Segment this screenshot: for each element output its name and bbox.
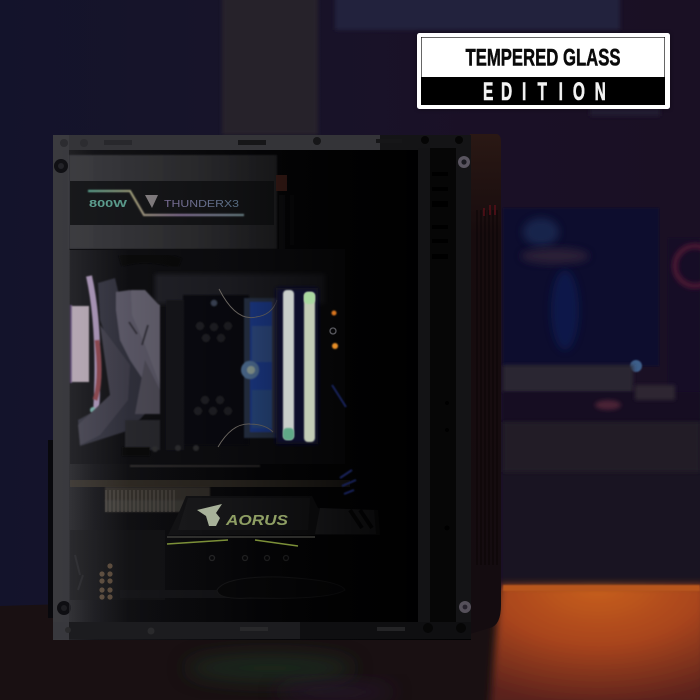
bright components behind glass: [167, 288, 356, 546]
front panel: [470, 134, 501, 634]
RGB glow strip: [272, 472, 312, 476]
badge subtitle: EDITION: [483, 78, 606, 106]
orange motherboard LEDs: [330, 310, 338, 349]
rear fan: [70, 276, 99, 414]
left frame: [53, 135, 69, 640]
copper wires: [218, 289, 277, 447]
AORUS label: AORUS: [225, 512, 288, 529]
frame markings: [60, 136, 466, 634]
logo mark: [145, 195, 158, 208]
power supply stripe: [88, 191, 244, 215]
wattage label: 800W: [89, 199, 128, 210]
red mesh glints: [484, 205, 495, 216]
brand label: THUNDERX3: [164, 198, 239, 210]
graphics card: [70, 480, 380, 600]
table surface: [0, 585, 700, 700]
badge title: TEMPERED GLASS: [466, 44, 620, 72]
CPU cooler tower: [166, 295, 249, 450]
motherboard area: [70, 249, 345, 467]
rear panel sliver: [48, 440, 54, 618]
RGB memory sticks: [276, 288, 318, 444]
blurred desk and keyboard: [503, 365, 700, 587]
badge: tempered glass edition: [417, 33, 670, 109]
PC case: [53, 134, 501, 640]
top frame: [53, 135, 471, 150]
blue cables: [332, 385, 356, 494]
glass haze: [69, 250, 129, 622]
front mesh vents: [477, 210, 497, 565]
blue cooler fan: [241, 298, 277, 438]
glass shading: [69, 150, 418, 622]
shroud: [168, 496, 380, 535]
lower motherboard: [70, 530, 345, 600]
glass panel: [53, 135, 471, 640]
bottom frame: [53, 622, 471, 639]
lower board details: [122, 420, 260, 467]
thumb screws: [54, 159, 68, 173]
AORUS eagle logo: [197, 504, 222, 526]
green accent lines: [167, 540, 298, 546]
blurred monitor: [503, 208, 700, 418]
red connector: [276, 175, 287, 191]
VRM heatsink: [78, 278, 160, 446]
power supply: [69, 155, 294, 250]
right rail columns: [418, 148, 430, 622]
